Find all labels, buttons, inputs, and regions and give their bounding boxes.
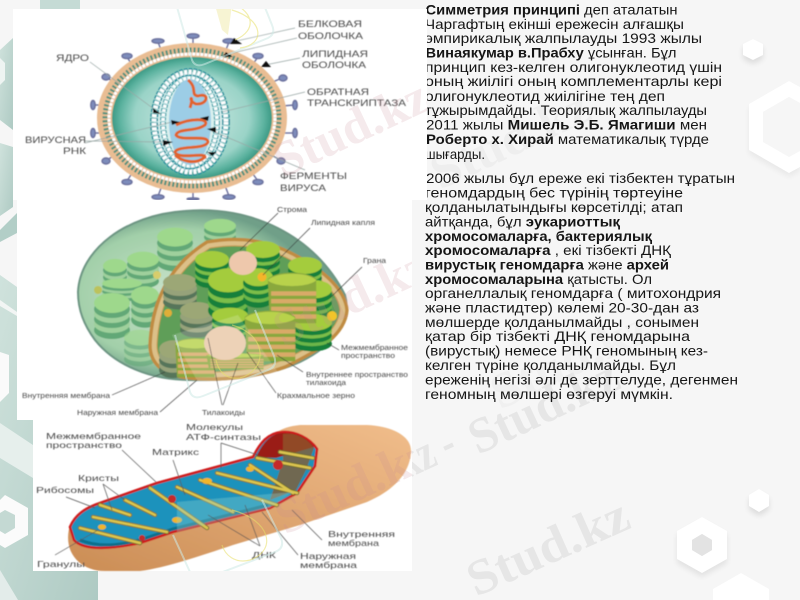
text block: symmetry principle: шығарды. <box>425 147 485 162</box>
mitochondrion labels: мембрана <box>328 538 379 548</box>
text block: 2006 genome rule: хромосомаларға , екі тізбекті ДНҚ <box>425 243 659 258</box>
mitochondrion cutaway interior <box>70 432 317 548</box>
chloroplast labels: тилакоида <box>306 378 347 387</box>
mitochondrion labels: ДНК <box>252 550 276 560</box>
watermark text on background: kz - <box>386 414 464 490</box>
watermark text over diagrams: Stud.kz <box>266 424 439 545</box>
mitochondrion labels: АТФ-синтазы <box>186 432 261 442</box>
text block: 2006 genome rule: айтқанда, бұл эукариоттық <box>425 214 612 230</box>
mitochondrion cristae <box>80 452 313 543</box>
virus pointers <box>85 28 305 170</box>
text block: 2006 genome rule: мөлшерде қолданылмайды , сонымен <box>425 315 699 330</box>
text block: 2006 genome rule: хромосомаларына қатысты. Ол <box>425 272 645 287</box>
mitochondrion labels: Межмембранное <box>46 431 141 441</box>
text block: symmetry principle: олигонуклеотид жиілігіне тең деп <box>425 89 665 104</box>
chloroplast labels: Липидная капля <box>311 218 375 227</box>
text block: 2006 genome rule: хромосомаларға, бактериялық <box>425 229 652 244</box>
text block: symmetry principle: Чаргафтың екінші ережесін алғашқы <box>425 17 684 32</box>
text block: symmetry principle: принцип кез-келген олигонуклеотид үшін <box>425 60 722 75</box>
text block: 2006 genome rule: келген түріне қолданылмайды. Бұл <box>425 358 676 373</box>
mitochondrion granules <box>98 460 283 541</box>
text block: symmetry principle: эмпирикалық жалпылауды 1993 жылы <box>425 31 702 46</box>
chloroplast labels: Тилакоиды <box>202 408 245 417</box>
mitochondrion outer body <box>68 425 411 571</box>
text block: symmetry principle: Винаякумар в.Прабху ұсынған. Бұл <box>426 46 670 60</box>
virus labels: БЕЛКОВАЯ <box>298 19 362 29</box>
chloroplast cutaway <box>150 239 347 379</box>
mitochondrion labels: Гранулы <box>37 559 85 569</box>
chloroplast labels: Межмембранное <box>341 343 408 352</box>
translucent matrix sheet <box>177 492 293 532</box>
chloroplast outer body <box>78 210 347 380</box>
mitochondrion labels <box>36 422 396 570</box>
chloroplast labels: Внутренняя мембрана <box>22 391 111 400</box>
chloroplast labels: Грана <box>363 256 387 265</box>
text block: 2006 genome rule: (вирустық) немесе РНҚ геномының кез- <box>425 344 708 358</box>
text block: symmetry principle: оның жиілігі оның комплементарлы кері <box>425 74 722 89</box>
virus labels: ТРАНСКРИПТАЗА <box>307 98 406 108</box>
text block: 2006 genome rule: және пластидтер) көлемі 20-30-дан аз <box>425 300 699 316</box>
mitochondrion labels: Наружная <box>300 551 357 561</box>
virus labels: РНК <box>63 146 87 156</box>
mitochondrion labels: пространство <box>46 440 122 450</box>
chloroplast labels: Строма <box>277 205 308 214</box>
virus labels: ОБОЛОЧКА <box>298 31 363 41</box>
diagram: HIV virus structure <box>13 9 427 200</box>
grana stacks <box>159 241 332 378</box>
chloroplast labels: Наружная мембрана <box>77 408 159 417</box>
right hexagon decoration <box>677 39 800 600</box>
mitochondrion labels: Молекулы <box>186 422 243 432</box>
pale grana <box>94 219 236 366</box>
virus capsid <box>154 72 226 172</box>
virus labels: ВИРУСА <box>280 183 326 193</box>
watermark text on background: Stud.kz <box>421 77 599 200</box>
text block: 2006 genome rule: ереженің негізі әлі де зерттелуде, дегенмен <box>425 372 738 388</box>
text block: 2006 genome rule: вирустық геномдарға және архей <box>425 258 666 272</box>
virus envelope <box>97 43 287 193</box>
diagram: chloroplast structure <box>17 200 412 420</box>
virus labels: ЛИПИДНАЯ <box>302 49 368 59</box>
text block: symmetry principle: 2011 жылы Мишель Э.Б. Ямагиши мен <box>426 118 704 132</box>
text block: 2006 genome rule: қатар бір тізбекті ДНҚ геномдарына <box>425 329 691 344</box>
text block: 2006 genome rule: геномның мөлшері өзгеруі мүмкін. <box>425 387 673 402</box>
virus labels: ВИРУСНАЯ <box>25 135 86 145</box>
watermark text on background: Stud.kz <box>459 347 628 465</box>
watermark text over diagrams: Stud.kz <box>264 67 437 188</box>
chloroplast pointers <box>112 213 362 412</box>
virus labels: ФЕРМЕНТЫ <box>280 171 347 181</box>
text block: 2006 genome rule: 2006 жылы бұл ереже екі тізбектен тұратын <box>426 171 735 186</box>
text block: symmetry principle: тұжырымдайды. Теориялық жалпылауды <box>425 103 707 118</box>
virus labels: ОБРАТНАЯ <box>307 87 369 97</box>
virus RNA <box>175 80 208 162</box>
mitochondrion labels: Рибосомы <box>36 485 94 495</box>
mitochondrion labels: Внутренняя <box>328 529 396 539</box>
virus labels: ЯДРО <box>56 53 89 63</box>
chloroplast labels <box>22 205 408 417</box>
watermark logos over diagrams <box>173 0 282 579</box>
mitochondrion labels: мембрана <box>300 560 357 570</box>
mitochondrion labels: Матрикс <box>152 447 200 457</box>
text block: symmetry principle: Роберто х. Хирай математикалық түрде <box>426 132 695 147</box>
chloroplast labels: Крахмальное зерно <box>277 391 355 400</box>
text block: 2006 genome rule: қолданылатындығы көрсетілді; атап <box>425 200 683 215</box>
chloroplast labels: Внутреннее пространство <box>306 370 408 379</box>
mitochondrion pointers <box>55 443 322 555</box>
watermark text over diagrams: Stud.kz <box>264 236 437 357</box>
watermark text on background <box>386 77 659 600</box>
virus labels <box>25 19 406 193</box>
translucent overlay sheet <box>172 315 282 395</box>
mitochondrion labels: Кристы <box>78 473 119 483</box>
left teal hexagon decoration <box>0 0 98 600</box>
text block: 2006 genome rule: органеллалық геномдарға ( митохондрия <box>425 286 721 301</box>
watermark text over diagrams <box>274 88 427 533</box>
chloroplast labels: пространство <box>341 351 395 360</box>
text block: symmetry principle: Симметрия принципі деп аталатын <box>426 2 670 18</box>
virus labels: ОБОЛОЧКА <box>302 60 366 70</box>
virus spikes <box>91 34 297 200</box>
virus arrowheads <box>153 38 271 156</box>
watermark text on background: Stud.kz <box>481 297 659 420</box>
diagram: mitochondrion structure <box>33 420 412 571</box>
text block: 2006 genome rule: геномдардың бес түрінің төртеуіне <box>425 186 683 200</box>
starch and lipid granules <box>164 251 337 360</box>
